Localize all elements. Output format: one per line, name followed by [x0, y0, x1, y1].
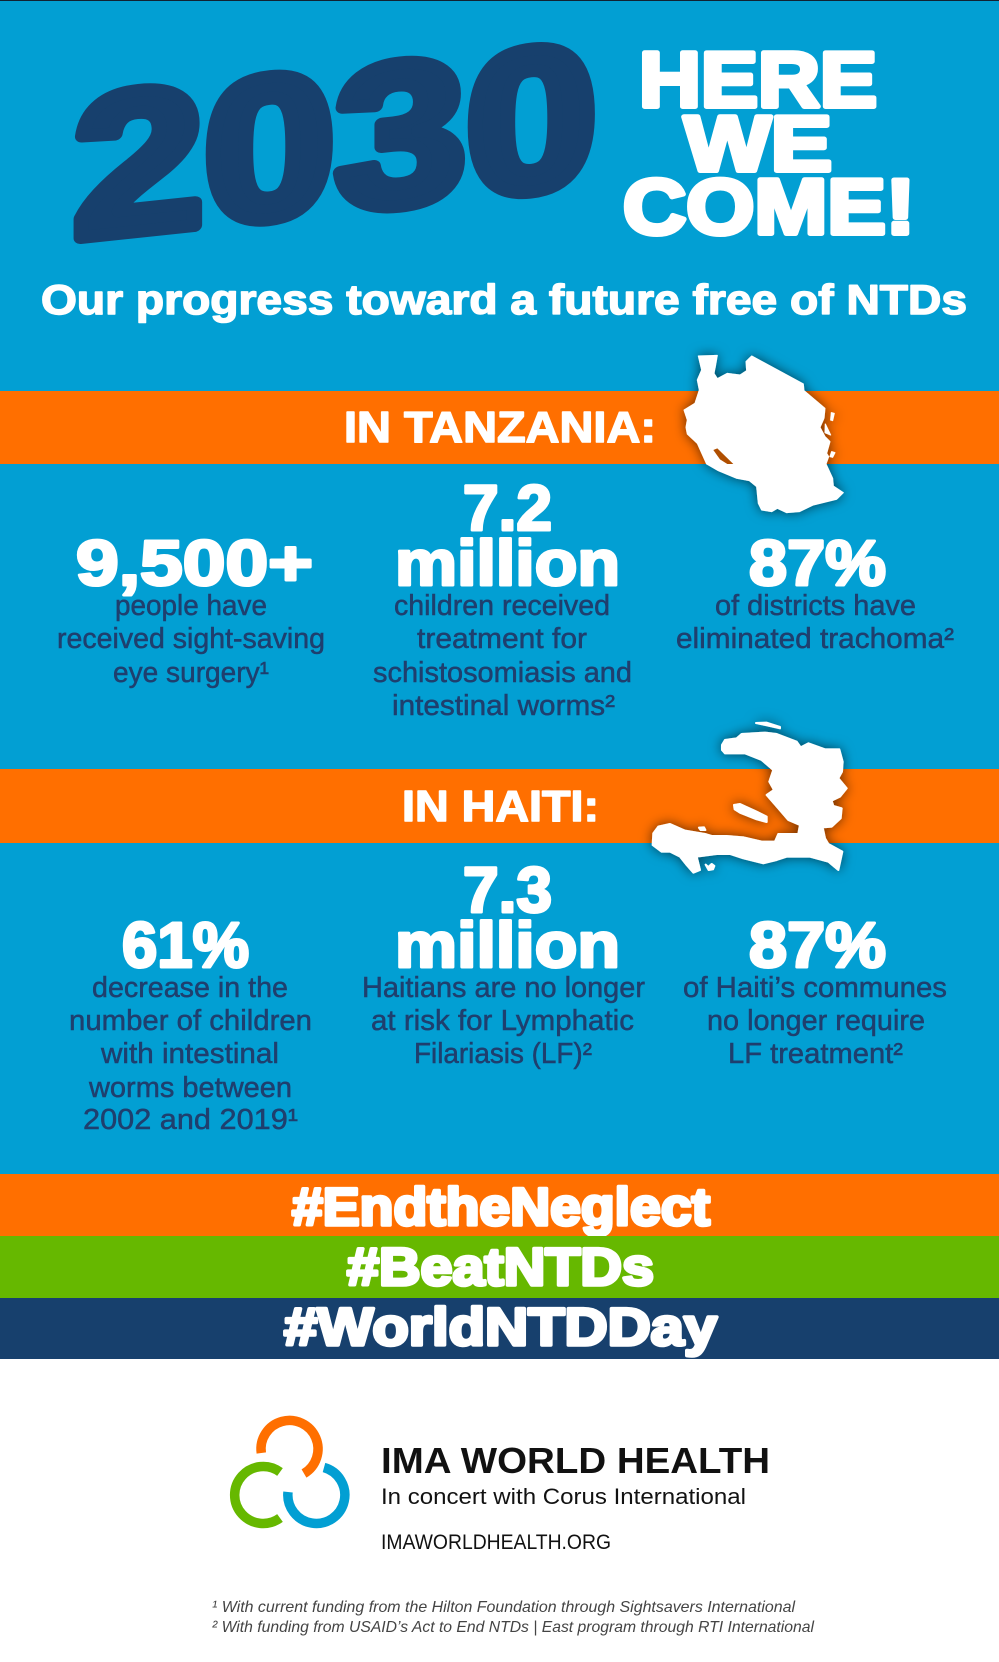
title: here we come: HERE	[639, 36, 877, 124]
hashtag band: EndtheNeglect	[0, 1174, 999, 1237]
stat: 87% communes: of Haiti’s communes	[683, 972, 947, 1004]
stat: 87% communes	[683, 909, 947, 1070]
logo: IMA World Health rings	[235, 1420, 345, 1524]
stat: 87% communes: 87%	[749, 909, 886, 981]
icon: lake on Tanzania map	[713, 448, 733, 464]
stat: 7.2 million: children received	[394, 590, 610, 622]
stat: 61%: 2002 and 2019¹	[83, 1104, 298, 1136]
hashtag band: BeatNTDs: #BeatNTDs	[347, 1238, 654, 1297]
stat: 9,500+	[57, 527, 325, 689]
hashtag band: WorldNTDDay	[0, 1298, 999, 1359]
footnotes	[212, 1599, 814, 1636]
stat: 87% districts	[676, 527, 954, 655]
icon: Tanzania map	[684, 355, 843, 513]
stat: 61%: with intestinal	[100, 1038, 279, 1070]
hashtag band: WorldNTDDay: #WorldNTDDay	[284, 1298, 718, 1357]
logo text: In concert with Corus International	[381, 1484, 746, 1509]
stat: 7.2 million: 7.2	[463, 472, 552, 544]
stat: 9,500+: eye surgery¹	[113, 657, 269, 689]
panel: Tanzania band	[0, 391, 999, 464]
stat: 7.3 million	[362, 854, 645, 1070]
stat: 7.2 million	[373, 472, 632, 722]
title: here we come	[623, 36, 915, 250]
heading: in Tanzania: IN TANZANIA:	[344, 403, 656, 452]
hashtag band: BeatNTDs	[0, 1236, 999, 1298]
stat: 7.3 million: Filariasis (LF)²	[414, 1038, 592, 1070]
title: here we come: WE	[684, 100, 832, 188]
icon: Haiti map	[653, 723, 847, 873]
logo text: IMAWORLDHEALTH.ORG	[381, 1531, 611, 1554]
hashtag band: EndtheNeglect: #EndtheNeglect	[292, 1178, 710, 1237]
stat: 87% districts: eliminated trachoma²	[676, 623, 954, 655]
stat: 7.2 million: treatment for	[417, 623, 587, 655]
stat: 87% communes: LF treatment²	[728, 1038, 903, 1070]
panel: Haiti band	[0, 769, 999, 843]
stat: 7.3 million: Haitians are no longer	[362, 972, 645, 1004]
stat: 9,500+: people have	[115, 590, 267, 622]
stat: 7.3 million: 7.3	[463, 854, 552, 926]
stat: 61%: 61%	[122, 909, 249, 981]
stat: 9,500+: 9,500+	[76, 527, 313, 599]
stat: 7.2 million: million	[395, 527, 620, 599]
title: here we come: COME!	[623, 162, 915, 250]
heading: in Haiti: IN HAITI:	[402, 782, 599, 831]
stat: 61%: number of children	[69, 1005, 312, 1037]
stat: 87% communes: no longer require	[707, 1005, 925, 1037]
footnotes: ² With funding from USAID’s Act to End NTDs | East program through RTI International	[212, 1619, 814, 1636]
footnotes: ¹ With current funding from the Hilton Foundation through Sightsavers International	[212, 1599, 795, 1616]
stat: 61%: worms between	[88, 1072, 292, 1104]
stat: 61%	[69, 909, 312, 1136]
stat: 87% districts: of districts have	[715, 590, 916, 622]
logo text	[381, 1440, 770, 1554]
subtitle: Our progress toward a future free of NTDs	[41, 276, 967, 323]
stat: 7.3 million: at risk for Lymphatic	[371, 1005, 634, 1037]
stat: 7.3 million: million	[395, 909, 620, 981]
stat: 61%: decrease in the	[92, 972, 288, 1004]
stat: 7.2 million: intestinal worms²	[392, 690, 615, 722]
logo text: IMA WORLD HEALTH	[381, 1440, 770, 1481]
stat: 9,500+: received sight-saving	[57, 623, 325, 655]
stat: 87% districts: 87%	[749, 527, 886, 599]
stat: 7.2 million: schistosomiasis and	[373, 657, 632, 689]
title: 2030: 2030	[73, 1, 597, 281]
